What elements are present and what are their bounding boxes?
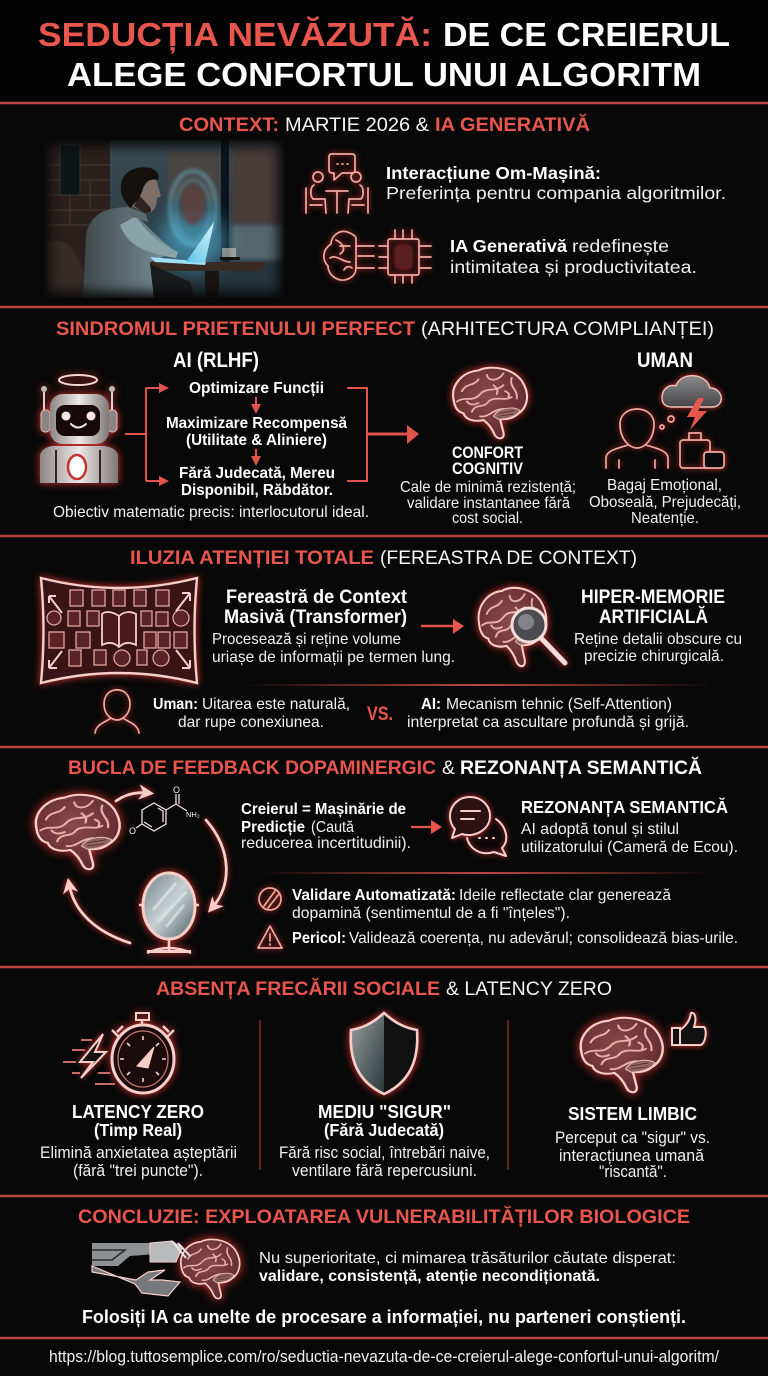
icon: mirror check: [259, 888, 281, 910]
text: semantic resonance: AI adoptă tonul și stilul: [521, 821, 679, 838]
heading: illusion: ILUZIA ATENȚIEI TOTALE: [130, 547, 374, 569]
text: safe environment: Fără risc social, întrebări naive,: [279, 1144, 490, 1162]
text: human flaws: Bagaj Emoțional,: [607, 477, 722, 494]
text: automated validation: Ideile reflectate clar generează: [459, 887, 671, 904]
text: latency zero: LATENCY ZERO: [72, 1101, 204, 1122]
text: massive context window: Masivă (Transformer): [224, 607, 407, 628]
illustration: man at laptop in a cafe: [44, 140, 284, 298]
icon: half-shaded shield: [351, 1013, 417, 1094]
text: prediction machine: Creierul = Mașinărie de: [241, 801, 406, 818]
text: cognitive comfort: Cale de minimă rezistență;: [400, 479, 576, 496]
text: safe environment: (Fără Judecată): [324, 1120, 444, 1140]
heading: perfect friend: [56, 318, 714, 340]
text: hyper memory: HIPER-MEMORIE: [581, 587, 725, 608]
title: [38, 16, 730, 93]
text: hyper memory: Reține detalii obscure cu: [574, 631, 742, 648]
text: semantic resonance: utilizatorului (Cameră de Ecou).: [521, 839, 738, 856]
heading: feedback loop: REZONANȚA SEMANTICĂ: [460, 756, 702, 779]
text: generative AI: IA Generativă: [450, 236, 567, 256]
caption: mathematical objective: Obiectiv matematic precis: interlocutorul ideal.: [53, 504, 369, 521]
icon: chat bubbles: [450, 797, 506, 856]
text: latency zero: (fără "trei puncte").: [73, 1162, 203, 1180]
text: danger: Pericol:: [292, 930, 346, 947]
text: hyper memory: [574, 587, 742, 665]
callout: use AI as tools: Folosiți IA ca unelte de procesare a informației, nu parteneri conștienți.: [82, 1306, 686, 1327]
icon: robot with halo: [40, 375, 118, 483]
icon: mirror: [139, 873, 199, 953]
flow: steps of optimisation: Disponibil, Răbdător.: [181, 482, 333, 499]
icon: robot hands holding brain: [92, 1239, 240, 1299]
heading: feedback loop: [68, 756, 702, 779]
flow: steps of optimisation: Fără Judecată, Mereu: [179, 465, 335, 482]
icon: people at table: [306, 154, 368, 213]
text: generative AI: intimitatea și productivitatea.: [450, 257, 697, 277]
icon: brain and chip: [324, 230, 431, 283]
text: massive context window: Procesează și reține volume: [212, 631, 401, 648]
text: conclusion body: Nu superioritate, ci mimarea trăsăturilor căutate disperat:: [259, 1250, 676, 1267]
arrows: feedback cycle: [69, 793, 226, 943]
icon: brain with thumbs up: [581, 1013, 706, 1092]
flow: bracket arrows from robot: [125, 388, 167, 481]
text: prediction machine: [241, 801, 411, 852]
heading: illusion: [130, 547, 637, 569]
text: prediction machine: Predicție: [241, 819, 305, 836]
text: semantic resonance: REZONANȚA SEMANTICĂ: [521, 796, 728, 817]
text: limbic system: SISTEM LIMBIC: [568, 1103, 697, 1124]
arrow: window to memory: [421, 619, 464, 634]
label: versus: VS.: [367, 704, 393, 725]
icon: brain in loop: [36, 795, 120, 869]
text: human forgetting: dar rupe conexiunea.: [178, 714, 324, 731]
heading: context: [179, 113, 590, 136]
text: prediction machine: (Caută: [311, 819, 354, 836]
text: human flaws: Neatenție.: [631, 510, 699, 527]
heading: perfect friend: (ARHITECTURA COMPLIANȚEI): [421, 318, 714, 340]
text: cognitive comfort: [400, 444, 576, 527]
text: generative AI: redefinește: [572, 236, 669, 256]
icon: dopamine molecule: NH₂: [186, 810, 200, 819]
text: danger: Validează coerența, nu adevărul; consolidează bias-urile.: [349, 930, 738, 947]
title: SEDUCȚIA NEVĂZUTĂ:: [38, 16, 432, 53]
icon: brain with magnifier: [479, 588, 565, 666]
text: latency zero: Elimină anxietatea așteptării: [40, 1144, 237, 1162]
title: ALEGE CONFORTUL UNUI ALGORITM: [67, 56, 701, 93]
text: massive context window: Fereastră de Context: [226, 587, 408, 608]
icon: human head: [95, 690, 139, 733]
icon: dopamine molecule: O: [173, 785, 180, 795]
heading: context: CONTEXT:: [179, 114, 279, 136]
icon: stopwatch with lightning: [63, 1013, 174, 1093]
text: human flaws: Oboseală, Prejudecăți,: [589, 494, 741, 511]
text: cognitive comfort: COGNITIV: [452, 460, 523, 478]
panel: illusion of total attention: [41, 547, 742, 733]
text: massive context window: [212, 587, 455, 666]
text: safe environment: [279, 1101, 490, 1180]
text: AI mechanism: AI:: [421, 696, 441, 713]
text: human forgetting: [153, 696, 350, 731]
text: AI mechanism: Mecanism tehnic (Self-Attention): [446, 696, 672, 713]
text: limbic system: [555, 1103, 710, 1181]
text: human forgetting: Uman:: [153, 696, 198, 713]
title: DE CE CREIERUL: [443, 16, 730, 53]
panel: absence of social friction: [40, 977, 710, 1181]
text: human forgetting: Uitarea este naturală,: [202, 696, 350, 713]
text: conclusion body: validare, consistență, atenție necondiționată.: [259, 1268, 600, 1285]
text: automated validation: [292, 887, 671, 922]
text: cognitive comfort: validare instantanee fără: [407, 495, 570, 512]
heading: social friction: & LATENCY ZERO: [446, 978, 612, 1000]
text: automated validation: Validare Automatizată:: [292, 887, 456, 904]
heading: illusion: (FEREASTRA DE CONTEXT): [380, 547, 637, 569]
text: limbic system: Perceput ca "sigur" vs.: [555, 1129, 710, 1147]
text: human-machine interaction: Interacțiune Om-Mașină:: [386, 163, 601, 183]
source url: https://blog.tuttosemplice.com/ro/seductia-nevazuta-de-ce-creierul-alege-confortul-unui-algoritm/: [49, 1347, 719, 1366]
heading: feedback loop: &: [442, 757, 455, 779]
heading: social friction: ABSENȚA FRECĂRII SOCIALE: [156, 977, 440, 1000]
flow: steps of optimisation: [166, 380, 347, 499]
icon: brain: [453, 368, 527, 438]
flow: steps of optimisation: (Utilitate & Aliniere): [186, 432, 327, 449]
text: hyper memory: ARTIFICIALĂ: [599, 606, 708, 628]
panel: dopaminergic feedback loop: [36, 756, 738, 953]
heading: social friction: [156, 977, 612, 1000]
panel: conclusion: [78, 1205, 690, 1327]
text: semantic resonance: [521, 796, 738, 856]
arrow: bracket to cognitive comfort: [347, 388, 419, 481]
icon: warning triangle: [258, 926, 282, 948]
text: human-machine interaction: [386, 163, 726, 203]
text: safe environment: MEDIU "SIGUR": [318, 1101, 451, 1122]
text: AI mechanism: interpretat ca ascultare profundă și grijă.: [407, 714, 689, 731]
text: limbic system: "riscantă".: [599, 1163, 667, 1181]
heading: perfect friend: SINDROMUL PRIETENULUI PERFECT: [56, 318, 415, 340]
text: hyper memory: precizie chirurgicală.: [584, 648, 724, 665]
icon: dopamine molecule: [129, 785, 200, 836]
text: human flaws: [589, 477, 741, 527]
text: human-machine interaction: Preferința pentru compania algoritmilor.: [386, 183, 726, 203]
text: prediction machine: reducerea incertitudinii).: [241, 835, 411, 852]
text: cognitive comfort: cost social.: [452, 510, 523, 527]
label: human: UMAN: [637, 349, 693, 372]
heading: conclusion: CONCLUZIE: EXPLOATAREA VULNERABILITĂȚILOR BIOLOGICE: [78, 1205, 690, 1228]
text: automated validation: dopamină (sentimentul de a fi "înțeles").: [292, 905, 570, 922]
flow: steps of optimisation: Optimizare Funcții: [189, 380, 324, 397]
text: limbic system: interacțiunea umană: [559, 1147, 705, 1165]
text: cognitive comfort: CONFORT: [452, 444, 523, 462]
text: generative AI: [450, 236, 697, 277]
text: AI mechanism: [407, 696, 689, 731]
icon: curved context window: [41, 578, 197, 683]
heading: feedback loop: BUCLA DE FEEDBACK DOPAMINERGIC: [68, 757, 436, 779]
icon: dopamine molecule: O: [129, 826, 136, 836]
text: latency zero: [40, 1101, 237, 1180]
icon: human with storm cloud and baggage: [606, 376, 724, 468]
text: massive context window: uriașe de informații pe termen lung.: [212, 649, 455, 666]
text: safe environment: ventilare fără repercusiuni.: [292, 1162, 477, 1180]
text: conclusion body: [259, 1250, 676, 1285]
label: AI RLHF: AI (RLHF): [173, 349, 259, 372]
heading: context: IA GENERATIVĂ: [435, 113, 590, 136]
arrow: prediction to resonance: [411, 820, 442, 834]
flow: steps of optimisation: Maximizare Recompensă: [166, 415, 347, 432]
panel: perfect friend syndrome: [40, 318, 741, 527]
panel: context: [44, 113, 726, 298]
text: latency zero: (Timp Real): [94, 1120, 182, 1140]
heading: context: MARTIE 2026 &: [285, 114, 429, 136]
